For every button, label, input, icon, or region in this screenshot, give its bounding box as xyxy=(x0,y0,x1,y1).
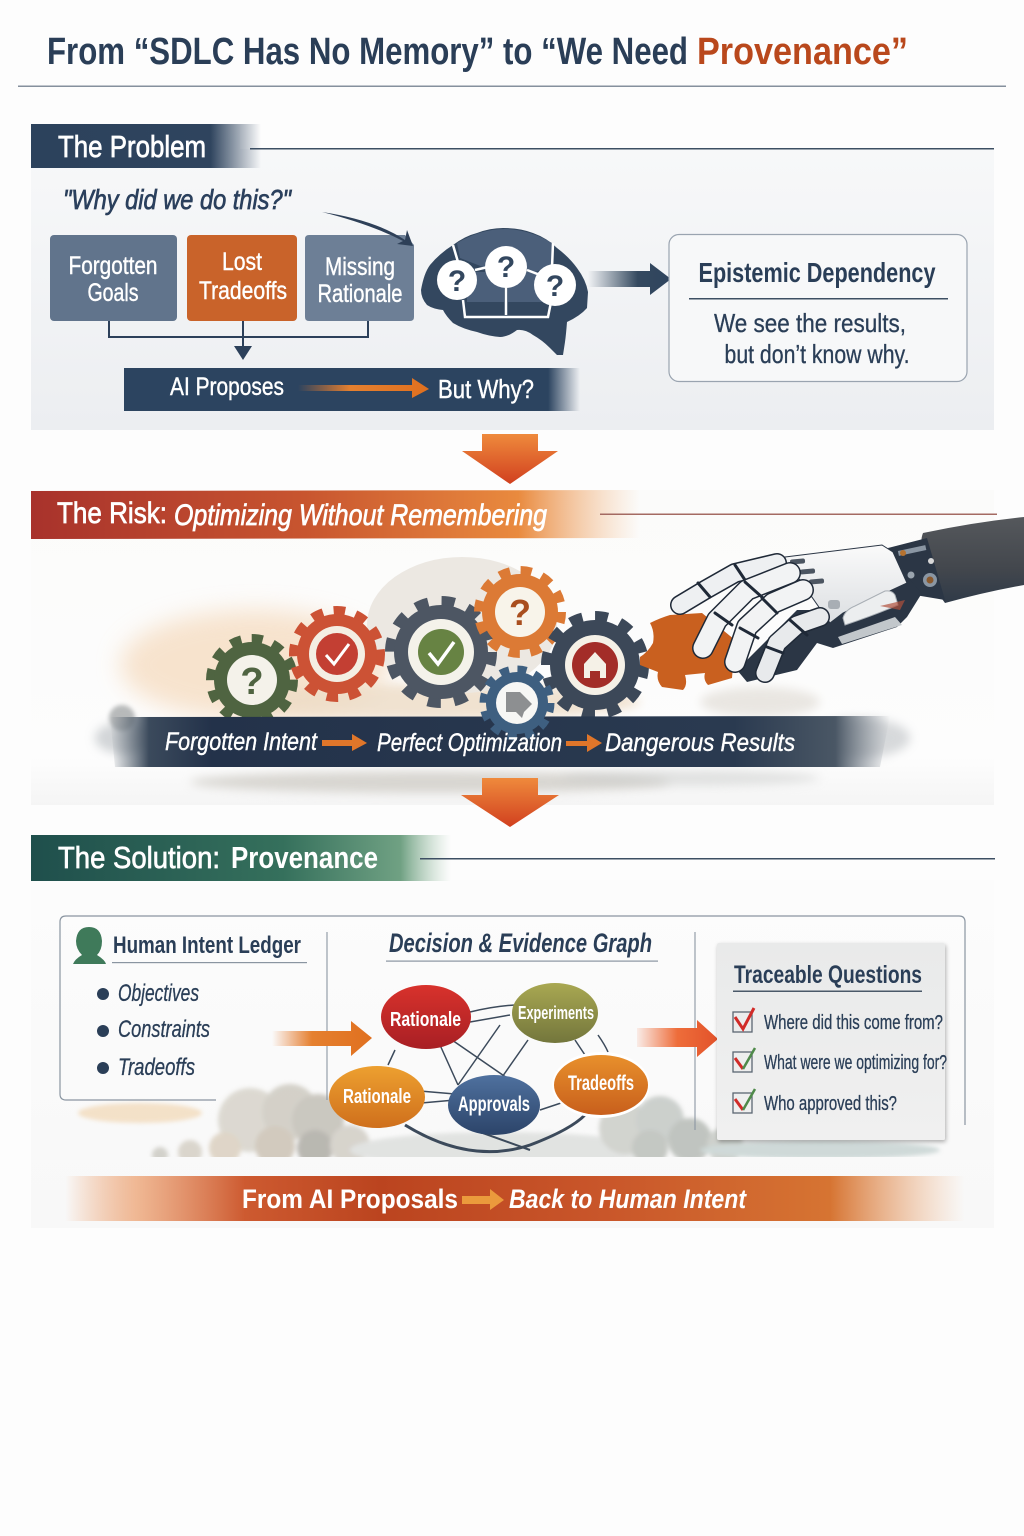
callout: epistemic dependency xyxy=(669,234,967,382)
list: tradeoffs xyxy=(97,1054,195,1081)
gear: blue pointer xyxy=(484,670,550,736)
node: experiments: Experiments xyxy=(518,1003,594,1023)
icon: brain with question marks: ? xyxy=(497,251,515,284)
box: missing rationale: Rationale xyxy=(318,280,402,308)
node: tradeoffs xyxy=(552,1052,650,1118)
gear: green question xyxy=(211,639,293,721)
card: traceable questions xyxy=(717,943,947,1140)
finger 3 xyxy=(735,590,803,662)
finger 2 xyxy=(703,573,790,648)
list: tradeoffs: Tradeoffs xyxy=(118,1054,195,1081)
node: experiments xyxy=(512,983,598,1043)
panel: the solution xyxy=(31,835,995,1228)
node: tradeoffs: Tradeoffs xyxy=(568,1072,634,1095)
puzzle piece xyxy=(640,613,735,690)
icon: person xyxy=(73,927,106,964)
arrow: problem to risk xyxy=(462,434,558,484)
icon: brain with question marks: ? xyxy=(448,265,466,298)
graph: decision and evidence xyxy=(329,928,658,1152)
question 2 xyxy=(733,1048,947,1074)
flow labels xyxy=(165,728,795,757)
arrow: ledger to graph xyxy=(272,1021,372,1056)
heading: the problem: The Problem xyxy=(58,129,206,164)
node: rationale orange: Rationale xyxy=(343,1086,411,1108)
back of hand xyxy=(777,545,907,623)
question 3: Who approved this? xyxy=(764,1093,897,1115)
bar: AI proposes but why: But Why? xyxy=(438,374,534,404)
heading: ledger: Human Intent Ledger xyxy=(113,932,301,959)
panel: the problem xyxy=(31,124,1000,430)
bar: intent to results xyxy=(110,716,890,767)
banner: from AI proposals back to human intent: From AI Proposals xyxy=(242,1184,458,1214)
callout: epistemic dependency: We see the results, xyxy=(714,308,906,338)
wrist connector xyxy=(888,538,945,600)
background clouds xyxy=(77,1082,940,1157)
bar: AI proposes but why: AI Proposes xyxy=(170,373,284,401)
heading: the risk: Optimizing Without Remembering xyxy=(174,499,547,532)
node: approvals: Approvals xyxy=(458,1093,530,1116)
question 1 xyxy=(733,1008,943,1034)
box: missing rationale: Missing xyxy=(325,253,395,281)
node: rationale red: Rationale xyxy=(390,1009,461,1031)
gear: green question: ? xyxy=(240,661,264,703)
finger 4 xyxy=(765,617,820,673)
node: rationale red xyxy=(381,985,471,1049)
panel: the risk xyxy=(31,490,1024,805)
heading: the solution xyxy=(31,835,451,881)
list: objectives xyxy=(97,980,199,1007)
title: Provenance” xyxy=(697,31,908,73)
heading: the solution: Provenance xyxy=(231,840,378,875)
curved pointer arrow xyxy=(322,212,413,246)
question 2: What were we optimizing for? xyxy=(764,1052,947,1074)
flow labels: Forgotten Intent xyxy=(165,728,318,756)
background clouds xyxy=(95,557,910,793)
question 3 xyxy=(733,1089,897,1115)
gear: grey check xyxy=(391,602,491,702)
box: missing rationale xyxy=(305,235,414,321)
banner: from AI proposals back to human intent: Back to Human Intent xyxy=(509,1184,747,1214)
connector lines to AI bar xyxy=(109,321,368,360)
box: forgotten goals: Goals xyxy=(88,279,138,307)
robot arm xyxy=(680,517,1024,682)
frame lines xyxy=(60,916,965,1130)
arrow: risk to solution xyxy=(461,778,559,827)
dark under-hand xyxy=(737,577,922,682)
heading: the solution: The Solution: xyxy=(58,840,220,875)
quote text: "Why did we do this?" xyxy=(63,184,292,215)
gear: orange question xyxy=(479,571,561,653)
icon: brain with question marks xyxy=(421,228,588,355)
bar: AI proposes but why xyxy=(124,368,580,411)
column: human intent ledger xyxy=(73,927,307,1081)
heading: the risk xyxy=(31,490,640,539)
question 1: Where did this come from? xyxy=(764,1012,943,1034)
heading: the problem xyxy=(31,124,261,168)
heading: the risk: The Risk: xyxy=(57,497,167,530)
box: lost tradeoffs xyxy=(187,235,297,321)
node: rationale orange xyxy=(329,1066,425,1128)
finger 1 xyxy=(680,563,777,605)
flow labels: Perfect Optimization xyxy=(377,729,562,757)
callout: epistemic dependency: Epistemic Dependency xyxy=(698,257,936,288)
box: forgotten goals xyxy=(50,235,177,321)
box: lost tradeoffs: Tradeoffs xyxy=(199,277,287,305)
callout: epistemic dependency: but don’t know why. xyxy=(724,339,910,369)
card: traceable questions: Traceable Questions xyxy=(734,961,922,989)
box: lost tradeoffs: Lost xyxy=(222,248,262,276)
arm sleeve xyxy=(921,517,1024,603)
box: forgotten goals: Forgotten xyxy=(68,252,158,280)
gear: red check xyxy=(294,611,380,697)
arrow: graph to questions xyxy=(637,1020,718,1057)
list: constraints: Constraints xyxy=(118,1016,210,1043)
arrow: brain to epistemic dependency xyxy=(588,263,671,295)
title: From “SDLC Has No Memory” to “We Need xyxy=(47,31,688,73)
icon: brain with question marks: ? xyxy=(546,270,564,303)
gear: orange question: ? xyxy=(509,592,531,633)
graph edges xyxy=(388,1005,608,1152)
gear: dark warning xyxy=(547,617,643,713)
heading: graph: Decision & Evidence Graph xyxy=(389,928,652,958)
banner: from AI proposals back to human intent xyxy=(65,1176,965,1221)
list: constraints xyxy=(97,1016,210,1043)
node: approvals xyxy=(448,1075,540,1135)
list: objectives: Objectives xyxy=(118,980,199,1007)
flow labels: Dangerous Results xyxy=(605,729,795,757)
